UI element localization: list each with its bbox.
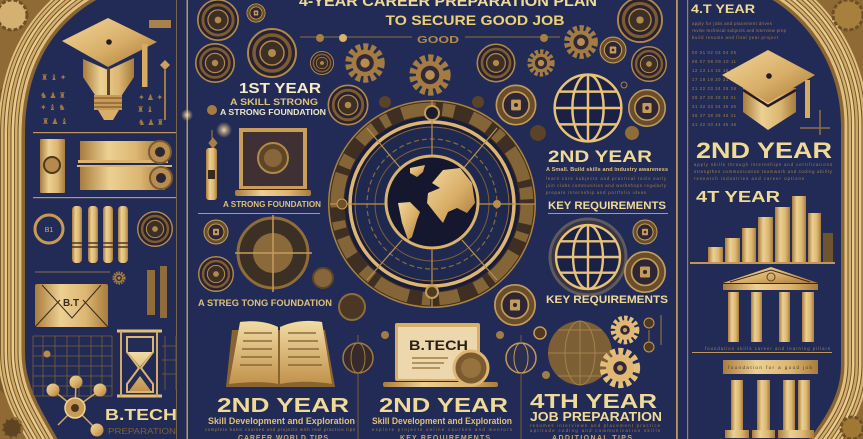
icon: open book [226, 321, 335, 387]
icon: graduation cap bulb [62, 18, 157, 120]
icon: laptop B.Tech: B.TECH [409, 337, 468, 353]
text: 4th year: 4TH YEAR [530, 391, 658, 413]
icon: envelope [35, 284, 108, 327]
text: 1st year [220, 80, 326, 117]
small icons: left panel scribbles: ✦ ♝ ♞ [40, 103, 66, 112]
text: right panel year heads: apply skills through internships and certifications [694, 162, 832, 167]
text: key requirements: KEY REQUIREMENTS [546, 294, 668, 306]
table of tiny figures: 21 22 23 24 25 26 [692, 86, 737, 91]
text: 2nd year centre [372, 395, 512, 439]
table of tiny figures: 26 27 28 29 30 31 [692, 95, 737, 100]
icon: laptop B.Tech [383, 323, 498, 387]
label: B.Tech preparation: PREPARATION [108, 427, 176, 436]
title: GOOD [417, 35, 459, 46]
text: 2nd year right: learn core subjects and practical tools early [546, 176, 667, 181]
icon: temple lower [723, 360, 818, 438]
text: a strong foundation variant: A STREG TONG FOUNDATION [198, 298, 332, 308]
table of tiny figures: 00 01 02 03 04 05 [692, 50, 737, 55]
text: right panel year heads: research industries and career options [694, 176, 804, 181]
text: right panel header: build resume and final year project [692, 35, 779, 40]
icon: capsule [206, 130, 217, 200]
icons: small wire globes [343, 285, 550, 439]
medallions: upper second panel [181, 0, 296, 138]
icon: temple upper: foundation skills career and learning pillars [705, 346, 830, 351]
text: a strong foundation: A STRONG FOUNDATION [223, 200, 321, 209]
icons: tubes and dials [35, 206, 172, 318]
icon: wire globe lower with medallions [550, 219, 665, 295]
text: 2nd year left [205, 395, 355, 439]
text: 4th year: JOB PREPARATION [530, 409, 662, 424]
medallions and gears: top centre [310, 34, 552, 141]
text: right panel header: 4.T YEAR [691, 2, 755, 16]
text: right panel year heads: 2ND YEAR [696, 138, 832, 163]
text: 2nd year right [545, 147, 668, 212]
icon: hourglass [117, 331, 162, 397]
medallions: third panel top [567, 0, 666, 140]
central globe dial [329, 100, 535, 307]
title [299, 0, 597, 46]
icon: laptop with seal [235, 128, 311, 196]
text: 1st year: A SKILL STRONG [230, 97, 318, 107]
text: 2nd year left: 2ND YEAR [217, 395, 350, 417]
text: 2nd year left: Skill Development and Exploration [208, 416, 355, 426]
label: B.Tech preparation: B.TECH [105, 407, 177, 424]
medallions: lower second panel [199, 215, 365, 320]
text: right panel header [691, 2, 787, 40]
icon: temple lower: foundation for a good job [728, 365, 812, 370]
small icons: left panel scribbles: ♞ ♟ ♜ [138, 118, 164, 127]
text: 2nd year left: complete basic courses and projects with real practice tips [205, 427, 355, 432]
table of tiny figures [692, 50, 737, 127]
text: right panel header: revise technical subjects and interview prep [692, 28, 787, 33]
icon: wire globe upper [555, 75, 621, 141]
text: 2nd year centre: 2ND YEAR [379, 395, 509, 417]
table of tiny figures: 41 42 43 44 45 46 [692, 122, 737, 127]
small icons: left panel scribbles [40, 20, 171, 127]
text: 2nd year centre: explore projects online courses and mentors [372, 427, 512, 432]
small icons: left panel scribbles: ✦ ♟ ✦ [138, 93, 163, 102]
text: 4th year: resumes interviews and placement practice [530, 423, 661, 428]
table of tiny figures: 12 13 14 15 16 17 [692, 68, 737, 73]
icons: tubes and dials: B1 [45, 227, 53, 234]
text: 2nd year right: prepare internship and portfolio ideas [546, 190, 646, 195]
chart grid [33, 336, 176, 396]
text: 4th year: aptitude coding and communication skills [530, 428, 660, 433]
text: 2nd year right: KEY REQUIREMENTS [548, 200, 666, 212]
bar chart [708, 196, 833, 262]
text: 4th year [530, 391, 662, 439]
icon: temple upper [705, 267, 830, 351]
icon: envelope: B.T [63, 298, 79, 309]
small icons: left panel scribbles: ♜ ♝ [137, 105, 154, 114]
small icons: left panel scribbles: ♞ ♟ ♜ [40, 91, 66, 100]
table of tiny figures: 06 07 08 09 10 11 [692, 59, 737, 64]
globe continents [398, 165, 475, 240]
text: 2nd year right: 2ND YEAR [548, 147, 652, 166]
text: 2nd year right: A Small. Build skills and industry awareness [546, 167, 668, 173]
table of tiny figures: 36 37 38 39 40 41 [692, 113, 737, 118]
text: 1st year: 1ST YEAR [239, 80, 321, 97]
icons: scroll and banners [40, 139, 172, 193]
label: B.Tech preparation [105, 407, 177, 436]
small icons: left panel scribbles: ♜ ♟ ♝ [42, 117, 68, 126]
text: right panel year heads [694, 138, 833, 206]
text: right panel header: apply for jobs and placement drives [692, 21, 772, 26]
icon: graduation cap right [722, 50, 830, 135]
table of tiny figures: 17 18 19 20 21 22 [692, 77, 737, 82]
small icons: left panel scribbles: ♜ ♝ ✦ [41, 73, 67, 82]
title: TO SECURE GOOD JOB [386, 12, 564, 28]
text: 1st year: A STRONG FOUNDATION [220, 108, 326, 117]
text: 2nd year right: join clubs communities and workshops regularly [545, 183, 667, 188]
text: right panel year heads: strengthen communication teamwork and coding ability [694, 169, 833, 174]
icon: network nodes [46, 376, 106, 436]
icon: solid globe and gears [548, 315, 661, 385]
text: 2nd year centre: Skill Development and Exploration [372, 416, 512, 426]
text: right panel year heads: 4T YEAR [696, 189, 781, 206]
table of tiny figures: 31 32 33 34 35 36 [692, 104, 737, 109]
